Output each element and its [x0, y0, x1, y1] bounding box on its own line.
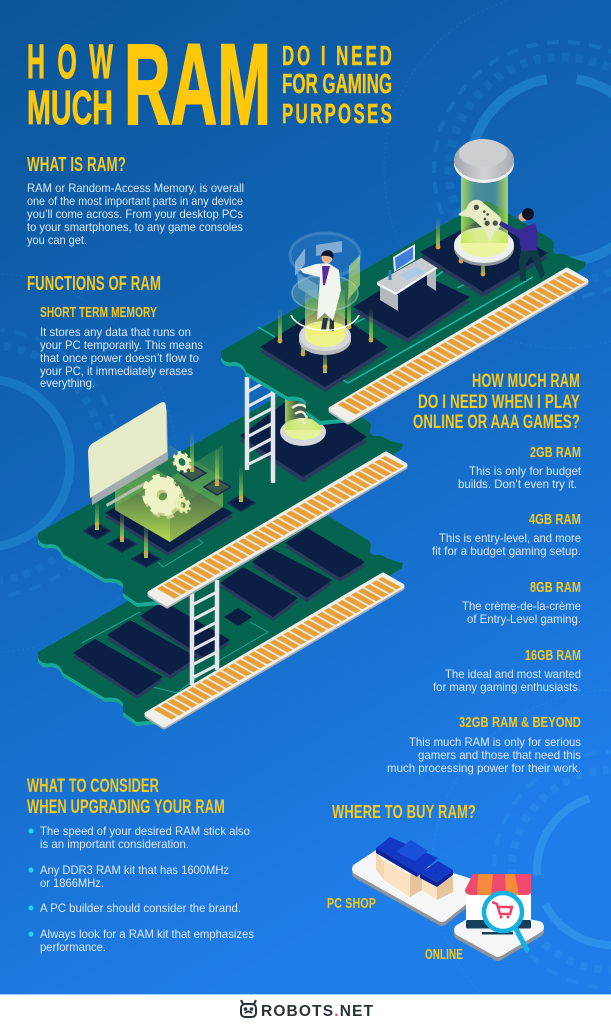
decorative rings bottom right	[432, 690, 611, 1024]
monitor panel	[88, 402, 168, 507]
decorative rings left	[0, 273, 176, 653]
2GB RAM: This is only for budget	[469, 465, 582, 478]
small chips and glow pins	[84, 432, 255, 567]
chip C	[420, 218, 548, 297]
section: what to consider: WHEN UPGRADING YOUR RAM	[27, 797, 225, 818]
section: where to buy: WHERE TO BUY RAM?	[332, 802, 476, 822]
label: PC shop: PC SHOP	[327, 896, 376, 912]
4GB RAM: 4GB RAM	[529, 511, 581, 528]
32GB RAM and beyond: This much RAM is only for serious	[409, 736, 581, 749]
section: functions of RAM	[27, 273, 203, 390]
section: what is RAM: RAM or Random-Access Memory, is overall	[27, 182, 244, 195]
title: DO I NEED	[282, 40, 392, 71]
controller	[460, 196, 505, 239]
connector 2	[150, 454, 405, 606]
4GB RAM: fit for a budget gaming setup.	[432, 545, 581, 558]
title: FOR GAMING	[282, 68, 392, 99]
section: what to consider: A PC builder should consider the brand.	[40, 902, 241, 915]
wordmark: ROBOTS.NET	[261, 1003, 374, 1020]
decorative rings top right	[384, 0, 611, 348]
8GB RAM	[462, 579, 581, 626]
16GB RAM: for many gaming enthusiasts.	[433, 681, 581, 694]
section: what to consider: Any DDR3 RAM kit that has 1600MHz	[40, 864, 229, 877]
gamer figure	[499, 208, 545, 281]
gamer jar with controller	[454, 139, 514, 266]
gears	[138, 449, 194, 523]
section: functions of RAM: FUNCTIONS OF RAM	[27, 273, 161, 295]
8GB RAM: of Entry-Level gaming.	[467, 613, 581, 626]
section: what is RAM: you can get.	[27, 234, 87, 247]
scientist in hologram jar	[290, 233, 360, 355]
monitor	[466, 893, 531, 934]
16GB RAM: The ideal and most wanted	[445, 668, 581, 681]
section: how much RAM	[413, 371, 580, 433]
32GB RAM and beyond: gamers and those that need this	[418, 749, 581, 762]
shop platform and building	[358, 837, 478, 920]
section: what to consider	[27, 776, 254, 954]
title: HOW	[27, 35, 113, 89]
board 1 traces	[258, 270, 533, 383]
section: what to consider: or 1866MHz.	[40, 877, 104, 890]
16GB RAM	[433, 647, 581, 694]
title: RAM	[124, 21, 271, 149]
board 2: gears and wifi jar	[38, 383, 403, 607]
glow pins on board 1	[278, 217, 485, 373]
scientist figure	[300, 250, 341, 331]
section: functions of RAM: that once power doesn’t flow to	[40, 352, 199, 365]
board 3: memory chips	[38, 502, 403, 726]
online platform and storefront	[460, 874, 538, 955]
connector 1	[331, 270, 586, 422]
board 1: processors	[221, 201, 586, 425]
section: what to consider: performance.	[40, 941, 106, 954]
section: what to consider: Always look for a RAM kit that emphasizes	[40, 928, 254, 941]
section: what is RAM: to your smartphones, to any game consoles	[27, 221, 243, 234]
2GB RAM: builds. Don’t even try it.	[458, 478, 577, 491]
section: what is RAM: one of the most important parts in any device	[27, 195, 243, 208]
section: what to consider: WHAT TO CONSIDER	[27, 776, 159, 797]
board 3 traces and chips	[73, 528, 365, 699]
4GB RAM: This is entry-level, and more	[439, 532, 581, 545]
title: MUCH	[27, 82, 113, 135]
section: functions of RAM: SHORT TERM MEMORY	[40, 304, 157, 321]
chip B with desk	[353, 244, 470, 343]
ladder upper	[247, 377, 273, 483]
footer	[0, 994, 611, 1024]
32GB RAM and beyond	[387, 714, 581, 775]
section: what to consider: The speed of your desired RAM stick also	[40, 825, 250, 838]
8GB RAM: 8GB RAM	[530, 579, 581, 596]
chip A	[260, 306, 388, 392]
wifi jar	[280, 398, 326, 446]
ladder lower	[192, 580, 217, 685]
section: what is RAM: you’ll come across. From your desktop PCs	[27, 208, 243, 221]
32GB RAM and beyond: much processing power for their work.	[387, 762, 581, 775]
4GB RAM	[432, 511, 581, 558]
section: functions of RAM: your PC, it immediately erases	[40, 365, 193, 378]
section: what to consider: is an important consideration.	[40, 838, 189, 851]
chip under wifi jar	[240, 391, 367, 482]
title: PURPOSES	[282, 98, 392, 129]
awning	[465, 874, 531, 895]
section: functions of RAM: your PC temporarily. This means	[40, 339, 203, 352]
16GB RAM: 16GB RAM	[525, 647, 581, 664]
building	[376, 837, 453, 900]
8GB RAM: The crème-de-la-crème	[462, 600, 581, 613]
section: functions of RAM: everything.	[40, 377, 95, 390]
icon: robot logo	[241, 1000, 256, 1017]
desk	[377, 244, 438, 311]
2GB RAM: 2GB RAM	[530, 444, 581, 461]
2GB RAM	[458, 444, 582, 491]
section: what is RAM	[27, 154, 244, 247]
section: functions of RAM: It stores any data that runs on	[40, 326, 191, 339]
magnifier and cart	[484, 893, 527, 950]
main chip with glow box	[105, 445, 233, 556]
label: online: ONLINE	[425, 947, 463, 963]
connector 3	[147, 575, 402, 727]
section: what is RAM: WHAT IS RAM?	[27, 154, 126, 176]
